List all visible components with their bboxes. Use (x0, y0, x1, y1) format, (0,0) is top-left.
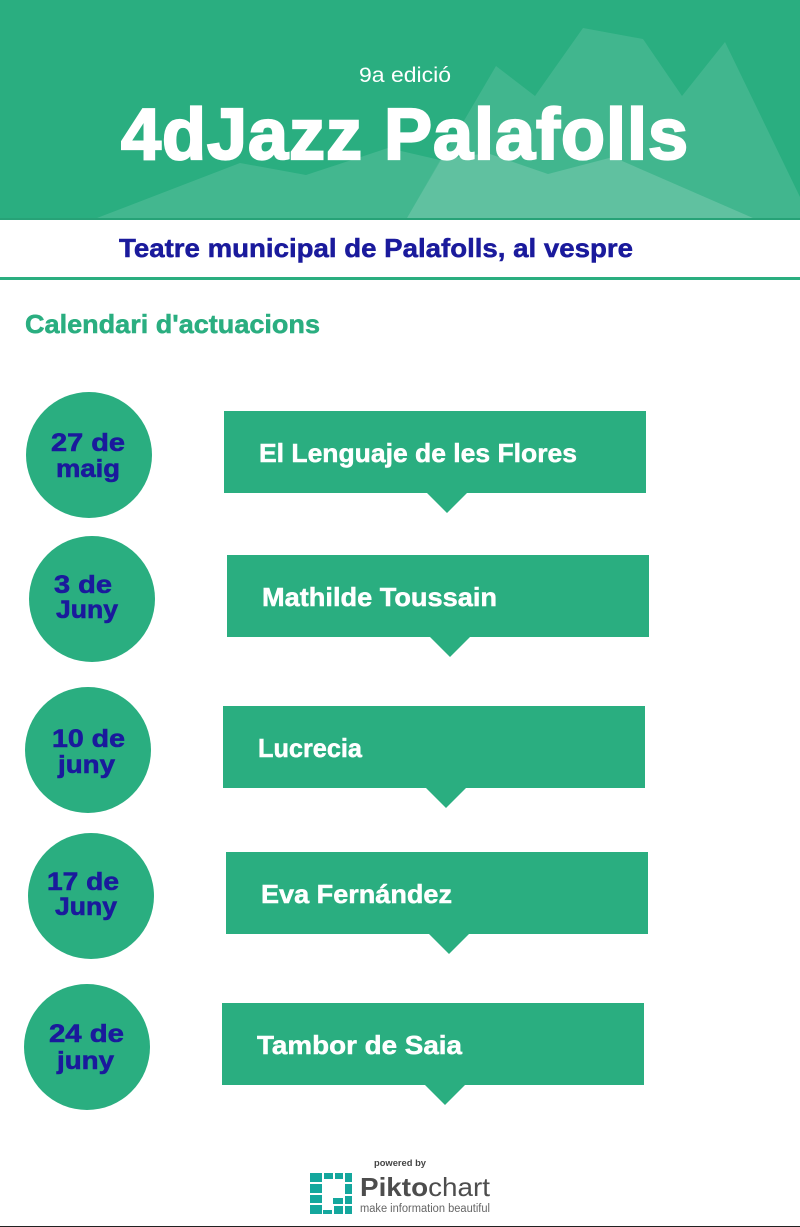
mountains illustration (97, 28, 800, 218)
date circle (28, 833, 154, 959)
date circle: 27 de (51, 429, 125, 457)
date circle: 3 de (54, 571, 112, 599)
performer callout: Lucrecia (258, 733, 363, 763)
performer callout (224, 411, 646, 513)
date circle: Juny (56, 596, 118, 624)
performer callout (227, 555, 649, 657)
date circle (29, 536, 155, 662)
date circle (24, 984, 150, 1110)
date circle (25, 687, 151, 813)
performer callout: Mathilde Toussain (262, 582, 497, 612)
performer callout (226, 852, 648, 954)
date circle: 10 de (52, 725, 125, 753)
date circle: maig (56, 455, 120, 483)
date circle (26, 392, 152, 518)
venue subtitle: Teatre municipal de Palafolls, al vespre (119, 233, 633, 263)
performer callout: Tambor de Saia (257, 1030, 463, 1060)
header banner (0, 0, 800, 220)
event row: 10 de juny (25, 687, 645, 813)
Piktochart footer logo (310, 1158, 491, 1215)
date circle: Juny (55, 893, 117, 921)
section heading: Calendari d'actuacions (25, 309, 320, 339)
date circle: juny (57, 751, 115, 779)
date circle: juny (56, 1047, 114, 1075)
edition label: 9a edició (359, 63, 451, 87)
performer callout (223, 706, 645, 808)
event row: 17 de Juny (28, 833, 648, 959)
powered by label: powered by (374, 1158, 427, 1169)
event row: 3 de Juny (29, 536, 649, 662)
performer callout: El Lenguaje de les Flores (259, 438, 577, 468)
Piktochart wordmark: Piktochart (360, 1172, 491, 1202)
date circle: 24 de (49, 1020, 124, 1048)
date circle: 17 de (47, 868, 119, 896)
performer callout (222, 1003, 644, 1105)
performer callout: Eva Fernández (261, 879, 452, 909)
event row: 24 de juny (24, 984, 644, 1110)
tagline: make information beautiful (360, 1203, 490, 1215)
event row: 27 de maig (26, 392, 646, 518)
icon: Piktochart mark (310, 1173, 352, 1214)
main title: 4dJazz Palafolls (121, 95, 688, 175)
